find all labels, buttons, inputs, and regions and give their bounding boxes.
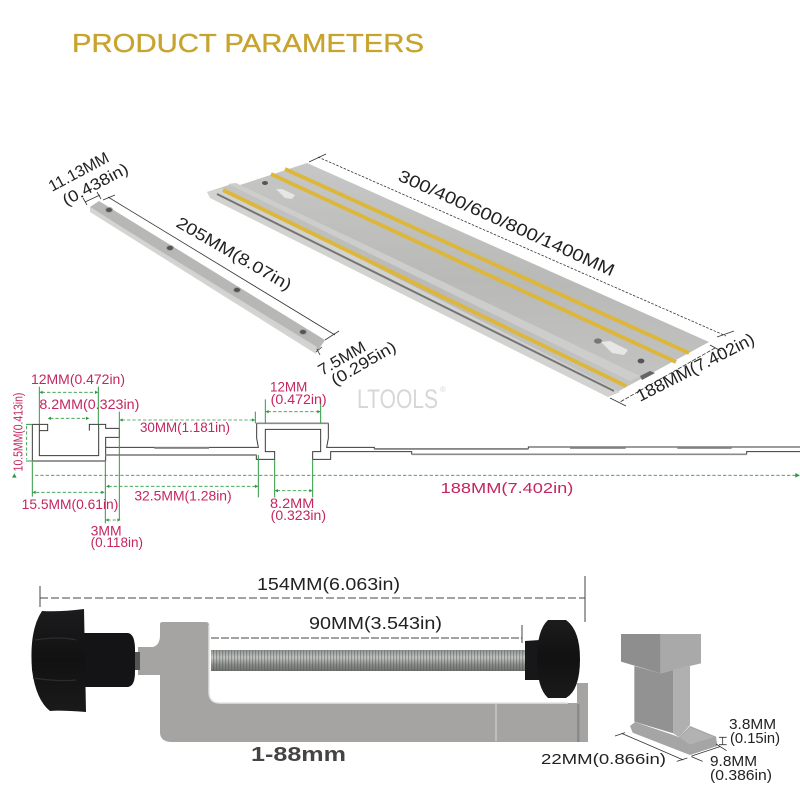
T-bolt dimension lines [615,733,727,761]
rail dark groove [217,194,614,391]
dimension labels: 30MM(1.181in) [140,420,230,435]
bar screws [105,207,307,335]
dimension labels: 10.5MM(0.413in) [12,393,26,471]
dimension labels [12,372,573,550]
bar dimension lines [83,192,339,355]
green dimension arrows [27,392,797,520]
T-bolt foot [630,722,717,755]
rail length dimension [309,154,734,337]
dimension labels: 3MM [91,523,122,538]
main guide rail [207,154,758,406]
dimension labels: 15.5MM(0.61in) [22,497,118,512]
T-bolt labels [541,716,780,784]
rail yellow strips [223,169,689,386]
bar height label: 11.13MM [46,150,112,196]
dimension labels: (0.472in) [271,392,327,407]
clamp body [138,622,588,742]
T-bolt labels: 22MM(0.866in) [541,751,666,768]
T-bolt labels: 9.8MM [710,753,757,770]
green arrowheads [12,391,800,522]
small sliding bar with dimensions [46,150,399,389]
T-bolt labels: (0.15in) [730,730,780,747]
T-bolt [615,634,727,761]
green extension lines [26,387,321,523]
rail body [207,163,709,397]
travel label: 90MM(3.543in) [309,613,442,633]
dimension labels: 8.2MM(0.323in) [39,397,139,412]
dimension labels: (0.323in) [271,508,326,523]
rail lower lip [207,188,620,397]
T-bolt head block [621,634,661,673]
bar length label: 205MM(8.07in) [173,214,295,294]
watermark: LTOOLS [357,384,438,414]
watermark: ® [440,385,446,394]
overall width dimension [40,576,585,622]
bar height inches label: (0.438in) [60,161,131,210]
dimension labels: 12MM [270,380,307,395]
threaded rod [211,650,527,671]
bar width label: 7.5MM [316,339,369,379]
profile outline [32,423,800,461]
cross-section drawing [12,372,800,550]
dimension labels: 32.5MM(1.28in) [134,489,232,504]
bar width inches label: (0.295in) [328,339,399,389]
profile thick segments [32,423,747,461]
right knob [525,620,580,698]
clamp highlight edges [209,625,568,703]
overall width label: 154MM(6.063in) [257,574,400,594]
clamp range label: 1-88mm [251,744,346,766]
rail length label: 300/400/600/800/1400MM [395,166,617,280]
T-bolt stem [634,666,673,733]
travel dimension [211,625,522,643]
title: PRODUCT PARAMETERS [72,28,424,58]
dimension labels: 188MM(7.402in) [441,480,573,497]
T-bolt labels: (0.386in) [710,767,772,784]
C-clamp [31,574,588,766]
dimension labels: 8.2MM [270,496,314,511]
rail width label: 188MM(7.402in) [633,330,758,406]
dimension labels: (0.118in) [91,535,143,550]
rail holes [262,181,655,380]
dimension labels: 12MM(0.472in) [31,372,125,387]
T-bolt labels: 3.8MM [729,716,776,733]
left knob [31,609,140,712]
bar body [90,201,325,354]
rail width dimension [610,345,721,406]
